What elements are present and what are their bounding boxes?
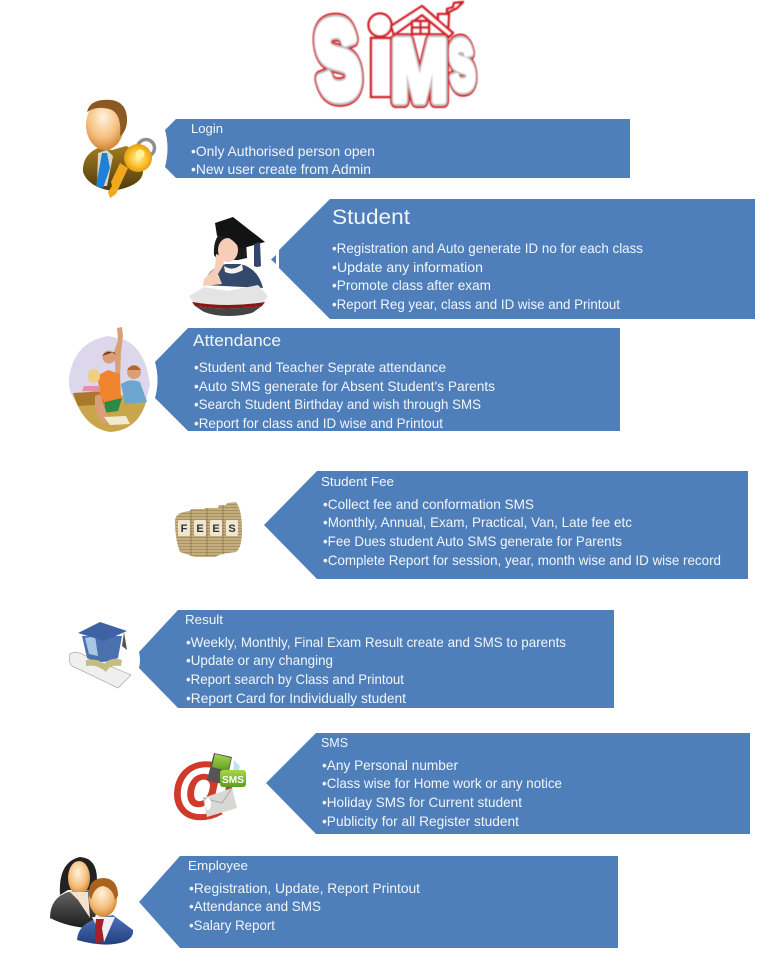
login bullet list: •New user create from Admin: [191, 161, 371, 177]
student fee bullet list: •Collect fee and conformation SMS: [323, 496, 534, 512]
result bullet list: •Weekly, Monthly, Final Exam Result create and SMS to parents: [186, 634, 566, 650]
student bullet list: [332, 240, 643, 312]
icon: diploma and graduation cap: [69, 622, 131, 688]
icon: two employees: [50, 857, 133, 945]
panel: student: [271, 199, 755, 319]
logo letter S: S: [310, 0, 365, 122]
employee bullet list: •Salary Report: [189, 917, 275, 933]
heading: result: Result: [185, 612, 223, 627]
student fee bullet list: [323, 496, 721, 568]
employee bullet list: •Registration, Update, Report Printout: [189, 880, 420, 896]
sms bullet list: •Holiday SMS for Current student: [322, 794, 522, 810]
heading: student: Student: [332, 206, 410, 229]
login bullet list: [191, 143, 375, 177]
attendance bullet list: •Report for class and ID wise and Printout: [194, 415, 443, 431]
result bullet list: •Report Card for Individually student: [186, 690, 406, 706]
student fee bullet list: •Complete Report for session, year, month wise and ID wise record: [323, 552, 721, 568]
logo letter s: s: [444, 8, 479, 110]
icon: classroom with raised hand: [68, 327, 156, 433]
heading: sms: SMS: [321, 735, 348, 750]
sms bullet list: [322, 757, 562, 829]
logo letter M: M: [391, 22, 448, 120]
student bullet list: •Promote class after exam: [332, 277, 491, 293]
icon: student reading with graduation cap: [189, 217, 268, 316]
icon: email and sms: @: [171, 749, 235, 823]
result bullet list: [186, 634, 566, 706]
fee label letters: [181, 523, 236, 535]
fee label letters: E: [212, 523, 220, 535]
heading: attendance: Attendance: [193, 331, 281, 350]
result bullet list: •Update or any changing: [186, 652, 333, 668]
heading: student fee: Student Fee: [321, 474, 394, 489]
icon: fee coin stacks: [175, 502, 242, 557]
panel: result: [139, 610, 614, 708]
logo letter s: s: [444, 8, 479, 110]
logo letter M: M: [391, 22, 448, 120]
logo roof and chimney: [391, 2, 463, 37]
panel: login: [165, 119, 630, 178]
sms bullet list: •Class wise for Home work or any notice: [322, 775, 562, 791]
attendance bullet list: •Search Student Birthday and wish through SMS: [194, 396, 481, 412]
sms bullet list: •Any Personal number: [322, 757, 458, 773]
logo letter s: s: [444, 8, 479, 110]
student bullet list: •Registration and Auto generate ID no for each class: [332, 240, 643, 256]
fee label letters: S: [228, 523, 236, 535]
attendance bullet list: [194, 359, 495, 431]
fee label letters: E: [196, 523, 204, 535]
attendance bullet list: •Auto SMS generate for Absent Student's Parents: [194, 378, 495, 394]
student fee bullet list: •Fee Dues student Auto SMS generate for Parents: [323, 533, 622, 549]
sms bullet list: •Publicity for all Register student: [322, 813, 519, 829]
employee bullet list: •Attendance and SMS: [189, 898, 321, 914]
student bullet list: •Update any information: [332, 259, 483, 275]
logo letter S: S: [310, 0, 365, 122]
logo: SIMS: [310, 0, 479, 122]
attendance bullet list: •Student and Teacher Seprate attendance: [194, 359, 446, 375]
result bullet list: •Report search by Class and Printout: [186, 671, 404, 687]
panel: employee: [139, 856, 618, 948]
panel: sms: [266, 733, 750, 834]
student fee bullet list: •Monthly, Annual, Exam, Practical, Van, Late fee etc: [323, 514, 632, 530]
panel: student fee: [264, 471, 748, 579]
student bullet list: •Report Reg year, class and ID wise and Printout: [332, 296, 620, 312]
panel: attendance: [155, 328, 620, 431]
sms badge label: SMS: [222, 775, 244, 786]
heading: login: Login: [191, 121, 223, 136]
fee label letters: F: [181, 523, 188, 535]
employee bullet list: [189, 880, 420, 933]
login bullet list: •Only Authorised person open: [191, 143, 375, 159]
logo letter M: M: [391, 22, 448, 120]
logo letter i: [368, 14, 392, 97]
heading: employee: Employee: [188, 858, 248, 873]
icon: person with key: [83, 100, 154, 198]
logo letter S: S: [310, 0, 365, 122]
